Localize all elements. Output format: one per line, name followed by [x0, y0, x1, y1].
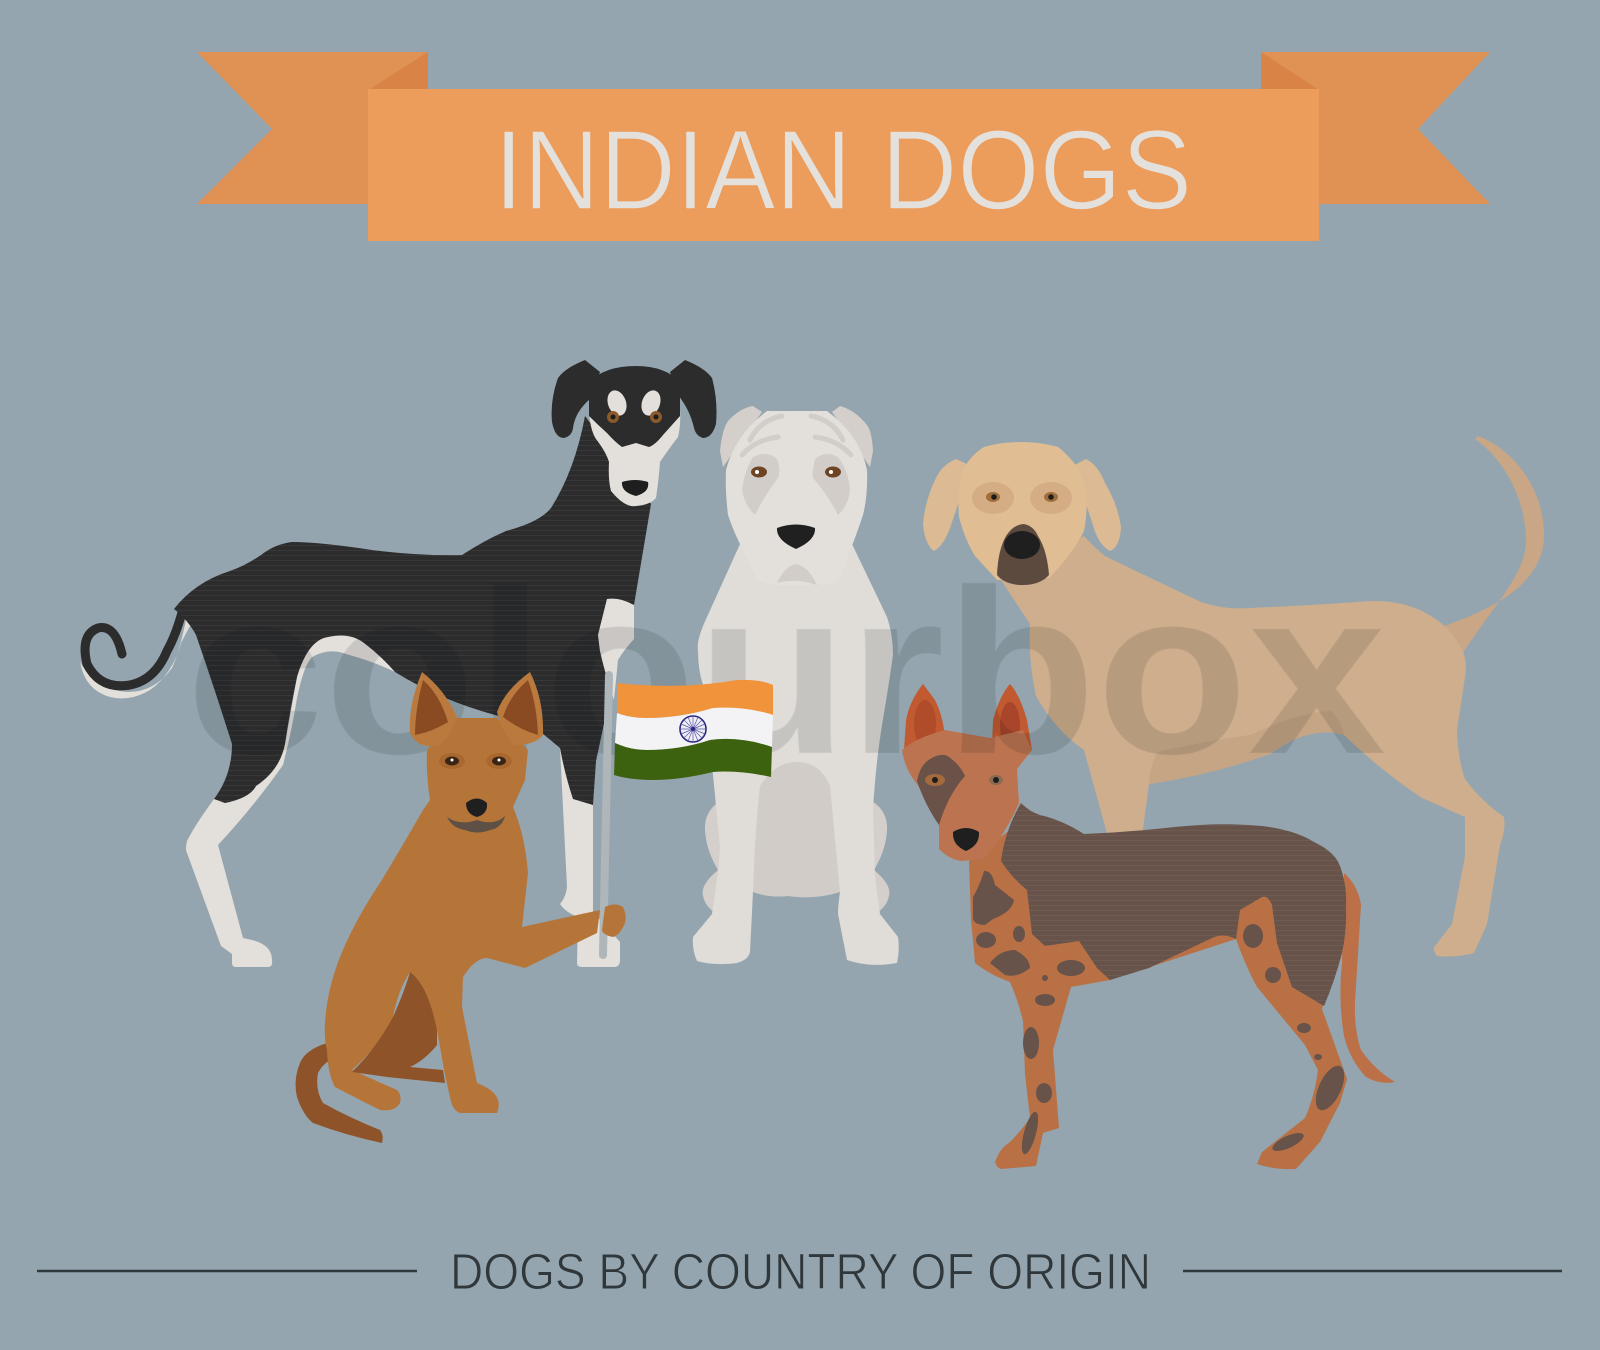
right haunch: [870, 800, 889, 916]
eye patches: [604, 388, 630, 418]
right eye patch: [813, 454, 850, 515]
ribbon left fold: [368, 52, 428, 90]
ear inner left: [914, 700, 936, 748]
tail: [1340, 873, 1395, 1083]
flag pole: [603, 675, 609, 955]
eye patch right: [638, 388, 664, 418]
ears: [552, 360, 716, 438]
flag of India: [614, 680, 773, 780]
right eye patch: [1030, 482, 1072, 514]
belly shade: [1149, 711, 1344, 784]
left haunch: [703, 800, 722, 916]
dog: brown and rust spotted hound: [902, 684, 1395, 1169]
watermark: colourbox: [186, 540, 1386, 803]
right eye: [650, 411, 662, 423]
tail: [1444, 436, 1544, 653]
dog: black and white sighthound: [80, 360, 716, 967]
left eye: [445, 756, 459, 766]
eye patch: [917, 755, 965, 825]
footer line left: [37, 1270, 417, 1272]
right ear: [992, 684, 1032, 750]
chakra: [680, 716, 706, 742]
right ear: [497, 672, 543, 745]
chest patch: [598, 599, 634, 700]
right eye: [1044, 492, 1058, 502]
right ear inner: [503, 680, 538, 735]
spots: [973, 871, 1350, 1156]
footer line right: [1183, 1270, 1562, 1272]
body: [1001, 536, 1504, 957]
left eye: [607, 411, 619, 423]
left brow shade: [439, 753, 465, 769]
left eye: [751, 466, 767, 478]
title: INDIAN DOGS: [494, 107, 1192, 233]
tail: [80, 603, 202, 698]
body: [693, 544, 899, 965]
title ribbon: [197, 52, 1490, 241]
head: [958, 442, 1087, 580]
right eye: [825, 466, 841, 478]
muzzle: [997, 524, 1049, 585]
green stripe: [614, 739, 772, 780]
tail: [296, 1043, 383, 1143]
dog: small tan dog sitting with flag: [296, 672, 626, 1143]
ribbon right tail: [1261, 52, 1490, 204]
face white: [589, 410, 680, 506]
mouth: [777, 564, 817, 585]
rust body and legs: [969, 830, 1347, 1169]
front leg: [560, 748, 620, 967]
brow wrinkles: [742, 416, 851, 455]
nose: [466, 798, 487, 817]
left ear: [923, 459, 971, 551]
ribbon left tail: [197, 52, 428, 204]
dark hind shade: [352, 972, 445, 1083]
hind leg: [186, 634, 395, 967]
left eye: [925, 774, 945, 786]
head: [902, 730, 1032, 861]
ear inner right: [1000, 702, 1020, 750]
body: [325, 718, 600, 1113]
body: [174, 416, 651, 805]
left eye patch: [972, 482, 1014, 514]
saffron stripe: [617, 680, 773, 718]
nose: [622, 480, 648, 496]
footer subtitle: DOGS BY COUNTRY OF ORIGIN: [450, 1243, 1151, 1300]
face black: [589, 366, 680, 447]
dark coat: [1001, 803, 1346, 1006]
left eye patch: [742, 454, 779, 515]
right ear: [832, 406, 873, 467]
left ear: [904, 684, 945, 750]
right ear: [1073, 459, 1121, 551]
belly shade: [753, 762, 840, 897]
ribbon main band: [368, 89, 1319, 241]
nose: [953, 828, 979, 851]
ribbon right fold: [1261, 52, 1319, 90]
white stripe: [615, 708, 773, 750]
nose: [777, 524, 815, 549]
right brow shade: [486, 753, 512, 769]
right eye: [989, 775, 1003, 785]
head: [726, 411, 867, 585]
left ear: [720, 406, 762, 467]
left ear: [410, 672, 457, 746]
paw: [602, 904, 626, 937]
dog: tan hound: [923, 436, 1544, 957]
right eye: [492, 756, 506, 766]
nose: [1004, 531, 1040, 559]
mouth: [447, 816, 505, 832]
left eye: [986, 492, 1000, 502]
left ear inner: [415, 680, 448, 735]
dog: white mastiff seated: [693, 406, 899, 965]
